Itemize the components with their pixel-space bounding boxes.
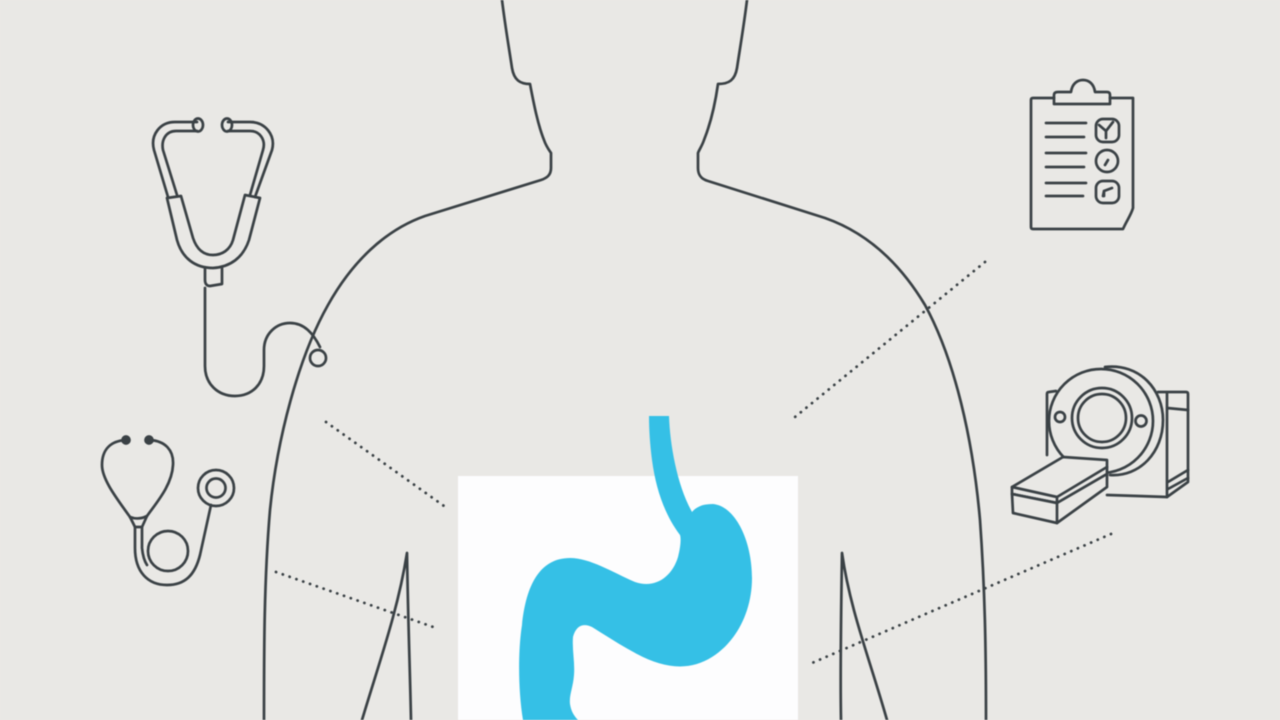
tube loop	[148, 531, 188, 571]
left armpit line	[362, 553, 411, 720]
right ear tube	[130, 440, 173, 518]
ear tips	[122, 436, 152, 444]
stomach	[519, 416, 752, 720]
gantry ring	[1049, 369, 1153, 473]
body outline	[264, 0, 986, 720]
patient table	[1012, 457, 1107, 523]
icon: large stethoscope	[153, 118, 326, 396]
chest piece	[310, 350, 326, 366]
tubing	[135, 505, 211, 585]
junction	[130, 516, 147, 527]
dotted connector: lower left	[276, 572, 439, 629]
yoke	[167, 195, 260, 268]
clip	[1054, 80, 1110, 104]
ear tubes	[153, 122, 197, 197]
ear tips	[193, 118, 232, 132]
icon: small stethoscope	[102, 436, 234, 585]
tube	[205, 288, 320, 396]
stem	[205, 268, 222, 286]
panel: white stomach backdrop	[458, 476, 798, 720]
icon: CT scanner	[1012, 367, 1188, 523]
right armpit line	[841, 553, 887, 720]
dotted connector: upper left	[326, 422, 444, 506]
sheet	[1031, 98, 1133, 229]
dotted connector: lower right	[812, 534, 1111, 663]
side sensors	[1055, 412, 1146, 426]
base housing	[1047, 391, 1188, 497]
check icons	[1096, 119, 1119, 203]
dotted connector: upper right	[795, 262, 985, 417]
bore	[1072, 388, 1132, 448]
text lines	[1046, 123, 1086, 196]
icon: clipboard checklist	[1031, 80, 1133, 229]
left ear tube	[102, 440, 130, 517]
chest piece	[198, 470, 234, 506]
